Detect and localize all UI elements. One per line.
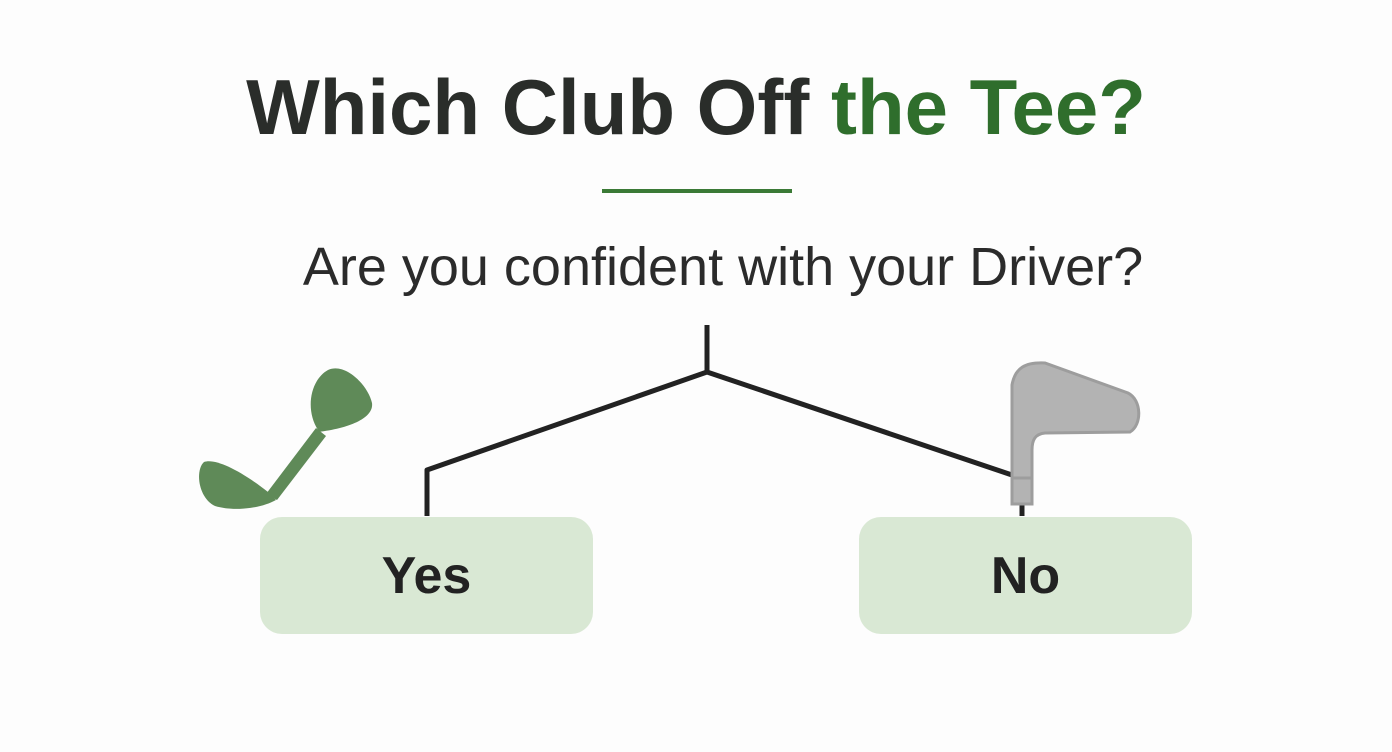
box: Yes: Yes [382, 546, 471, 604]
box: No: No [991, 546, 1060, 604]
question: Are you confident with your Driver? [303, 237, 1143, 297]
title underline [602, 189, 792, 193]
box: No [859, 517, 1192, 634]
title: Which Club Off the Tee? [246, 63, 1146, 151]
box: Yes [260, 517, 593, 634]
